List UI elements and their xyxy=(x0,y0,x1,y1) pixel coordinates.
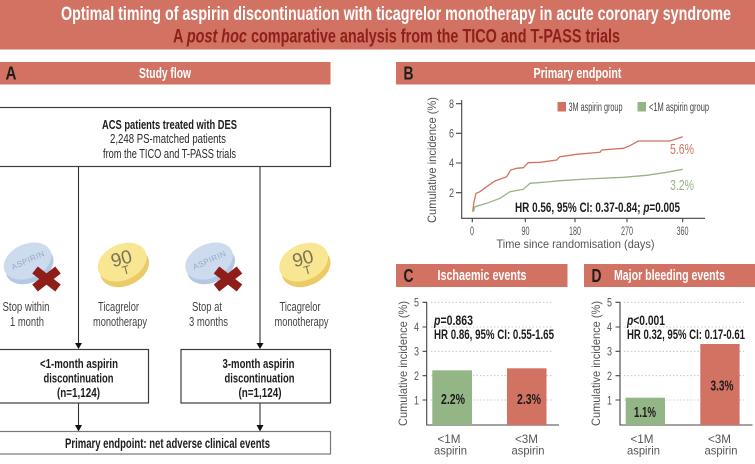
panel D axes xyxy=(589,296,752,426)
panel D statistics: p<0.001 xyxy=(626,313,665,328)
green curve: under 1M aspirin group xyxy=(473,169,683,212)
icon: aspirin pill crossed, right xyxy=(179,235,241,291)
panel C axes: 2 xyxy=(414,369,419,383)
chart axes: 2 xyxy=(449,186,454,200)
chart axes: 0 xyxy=(470,224,474,238)
chart legend: <1M aspirin group xyxy=(649,102,709,114)
panel C statistics: HR 0.86, 95% CI: 0.55-1.65 xyxy=(434,327,554,342)
population box: ACS patients treated with DES xyxy=(102,117,237,132)
icon: ticagrelor pill, right xyxy=(273,235,337,294)
population box xyxy=(0,108,330,166)
panel B heading xyxy=(396,62,755,84)
panel C axes xyxy=(396,296,559,426)
panel D: major bleeding events xyxy=(584,264,755,458)
icon: ticagrelor pill, left: T xyxy=(121,262,132,278)
text: stop within 1 month: 1 month xyxy=(10,314,44,329)
panel D axes: 5 xyxy=(607,296,612,310)
chart axes: 8 xyxy=(449,97,454,111)
bar: under 3M 3.3% xyxy=(700,344,740,425)
chart legend: 3M aspirin group xyxy=(568,102,622,114)
panel D category labels: aspirin xyxy=(704,444,738,458)
panel C statistics: p=0.863 xyxy=(433,313,473,328)
chart axes: 180 xyxy=(569,224,581,238)
icon: ticagrelor pill, left xyxy=(92,235,155,294)
panel C category labels: <3M xyxy=(515,432,538,446)
chart legend xyxy=(558,102,709,114)
box: under 1-month discontinuation: (n=1,124) xyxy=(57,385,100,400)
population box: from the TICO and T-PASS trials xyxy=(103,146,236,161)
icon: aspirin pill crossed, left xyxy=(0,235,59,291)
panel D category labels xyxy=(627,432,738,458)
panel D axes: 4 xyxy=(607,320,612,334)
panel C heading xyxy=(396,264,568,287)
text: stop within 1 month xyxy=(2,299,50,329)
icon: ticagrelor pill, right: T xyxy=(302,262,313,278)
hazard ratio text: HR 0.56, 95% CI: 0.37-0.84; p=0.005 xyxy=(515,200,680,215)
panel D axes: 1 xyxy=(607,394,612,408)
panel B: primary endpoint xyxy=(396,62,755,251)
panel B heading: B xyxy=(404,64,414,84)
bar: under 1M 2.2%: 2.2% xyxy=(441,391,465,408)
population box: 2,248 PS-matched patients xyxy=(110,131,226,146)
panel D category labels: aspirin xyxy=(627,444,660,458)
bar: under 1M 2.2% xyxy=(432,370,472,425)
panel C axes: 4 xyxy=(414,320,419,334)
text: ticagrelor monotherapy, right: monotherapy xyxy=(274,314,329,329)
box: primary endpoint xyxy=(0,432,330,454)
panel D axes: 3 xyxy=(607,344,612,358)
text: ticagrelor monotherapy, left: monotherapy xyxy=(93,314,147,329)
box: 3-month discontinuation: 3-month aspirin xyxy=(222,356,295,371)
icon: aspirin pill crossed, left: ASPIRIN xyxy=(10,249,46,272)
chart axes: Time since randomisation (days) xyxy=(496,237,655,251)
panel D statistics xyxy=(626,313,745,342)
panel D axes: 2 xyxy=(607,369,612,383)
panel A heading: A xyxy=(6,64,16,84)
icon: ticagrelor pill, right: 90 xyxy=(290,246,316,272)
flow arrows xyxy=(75,166,264,432)
label: 5.6%: 5.6% xyxy=(670,141,694,158)
panel A: study flow xyxy=(0,62,337,454)
red curve: 3M aspirin group xyxy=(473,137,683,212)
panel C axes: 3 xyxy=(414,344,419,358)
panel A heading xyxy=(0,62,330,84)
box: under 1-month discontinuation xyxy=(0,350,148,403)
panel D heading: D xyxy=(592,266,602,286)
panel C category labels: aspirin xyxy=(512,444,544,458)
text: stop at 3 months xyxy=(189,299,228,329)
bar: under 1M 1.1% xyxy=(626,398,665,425)
chart axes: 4 xyxy=(449,156,454,170)
label: 3.2%: 3.2% xyxy=(670,177,694,194)
chart axes: 6 xyxy=(449,126,454,140)
box: 3-month discontinuation xyxy=(181,350,330,403)
panel D heading xyxy=(584,264,755,287)
panel C heading: C xyxy=(404,266,414,286)
bar: under 3M 3.3%: 3.3% xyxy=(710,378,734,394)
icon: aspirin pill crossed, right: ASPIRIN xyxy=(192,249,227,272)
text: stop at 3 months: Stop at xyxy=(192,299,222,314)
text: ticagrelor monotherapy, right xyxy=(274,299,329,329)
box: under 1-month discontinuation: discontinuation xyxy=(44,370,114,386)
title banner xyxy=(0,0,755,50)
panel C: ischaemic events xyxy=(396,264,568,458)
panel D category labels: <1M xyxy=(630,432,654,446)
panel C axes: 1 xyxy=(414,394,419,408)
text: stop at 3 months: 3 months xyxy=(189,314,228,329)
chart axes xyxy=(425,97,705,251)
text: ticagrelor monotherapy, right: Ticagrelor xyxy=(280,299,321,314)
icon: ticagrelor pill, left: 90 xyxy=(109,246,134,272)
panel C statistics xyxy=(433,313,554,342)
box: under 1-month discontinuation: <1-month aspirin xyxy=(40,356,118,371)
panel B heading: Primary endpoint xyxy=(534,66,622,82)
bar: under 3M 2.3% xyxy=(507,368,546,425)
box: primary endpoint: Primary endpoint: net adverse clinical events xyxy=(65,436,270,451)
panel C category labels: <1M xyxy=(438,432,460,446)
box: 3-month discontinuation: discontinuation xyxy=(224,370,295,386)
chart axes: 270 xyxy=(621,224,633,238)
panel D category labels: <3M xyxy=(708,432,731,446)
panel A heading: Study flow xyxy=(139,66,192,82)
chart axes: 360 xyxy=(676,224,689,238)
panel C category labels: aspirin xyxy=(434,444,467,458)
panel C category labels xyxy=(434,432,544,458)
chart axes: 90 xyxy=(522,224,530,238)
bar: under 1M 1.1%: 1.1% xyxy=(634,404,656,421)
panel C heading: Ischaemic events xyxy=(438,268,526,284)
text: ticagrelor monotherapy, left: Ticagrelor xyxy=(98,299,139,314)
panel C axes: 5 xyxy=(414,296,419,310)
chart axes: Cumulative incidence (%) xyxy=(425,97,439,223)
text: ticagrelor monotherapy, left xyxy=(93,299,147,329)
title banner: A post hoc comparative analysis from the TICO and T-PASS trials xyxy=(173,26,620,48)
box: 3-month discontinuation: (n=1,124) xyxy=(238,385,282,400)
bar: under 3M 2.3%: 2.3% xyxy=(517,391,541,408)
panel D axes: Cumulative incidence (%) xyxy=(589,301,603,426)
text: stop within 1 month: Stop within xyxy=(2,299,50,314)
panel C axes: Cumulative incidence (%) xyxy=(396,301,410,426)
